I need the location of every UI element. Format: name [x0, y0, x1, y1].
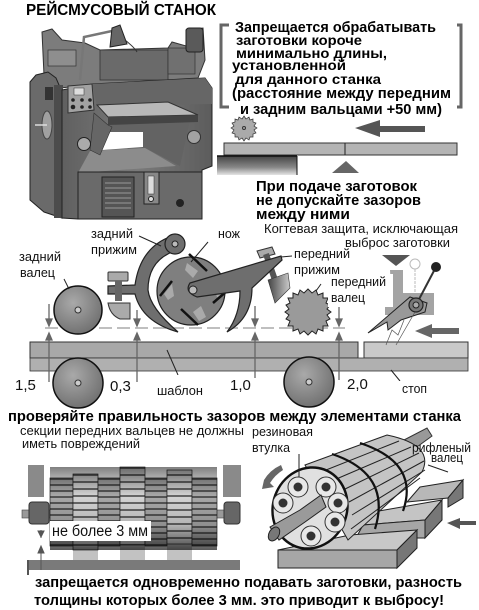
labels: gap values: [13, 375, 430, 408]
warning text: minimum workpiece length: [232, 20, 451, 118]
labels: sleeve and ribbed roller: рифленый: [412, 440, 471, 455]
labels: sleeve and ribbed roller: валец: [431, 450, 463, 465]
warning text: minimum workpiece length: установленной: [232, 57, 346, 73]
title: РЕЙСМУСОВЫЙ СТАНОК: [26, 1, 217, 19]
labels: cutting zone parts: передний: [294, 246, 350, 261]
illustration: thickness planer machine: [30, 25, 212, 219]
cross-section diagram of cutting zone: [30, 234, 468, 408]
warning text: no gaps: [256, 179, 421, 223]
labels: cutting zone parts: прижим: [294, 262, 340, 277]
front clamp arm: [188, 247, 290, 332]
labels: gap values: стоп: [402, 382, 427, 396]
bracket frame: [221, 25, 461, 107]
diagram: ribbed roller with rubber sleeves: [261, 428, 476, 568]
labels: sleeve and ribbed roller: [252, 424, 471, 465]
warning text: minimum workpiece length: минимально длины,: [236, 45, 387, 61]
leader lines: [64, 236, 400, 381]
labels: cutting zone parts: передний: [331, 274, 386, 289]
caption: claw protection: Когтевая защита, исключающая: [264, 221, 458, 236]
labels: gap values: 2,0: [347, 376, 368, 393]
labels: gap values: 1,0: [230, 377, 251, 394]
labels: cutting zone parts: задний: [91, 226, 133, 241]
warning text: workpiece thickness: толщины которых более 3 мм. это приводит к выбросу!: [34, 593, 444, 609]
labels: cutting zone parts: [19, 226, 393, 307]
cutter head with knives: [157, 254, 228, 325]
labels: gap values: 1,5: [15, 377, 36, 394]
diagram: feeding workpieces without gaps: [217, 116, 457, 175]
labels: cutting zone parts: прижим: [91, 242, 137, 257]
claw protection device: [368, 255, 459, 345]
warning text: minimum workpiece length: заготовки короче: [236, 32, 362, 48]
caption: roller sections: секции передних вальцев не должны: [20, 423, 244, 438]
labels: cutting zone parts: валец: [20, 265, 56, 280]
warning text: no gaps: не допускайте зазоров: [256, 193, 421, 209]
warning text: no gaps: между ними: [256, 207, 350, 223]
warning text: minimum workpiece length: Запрещается обрабатывать: [235, 20, 436, 36]
back board: [407, 480, 463, 507]
caption: claw protection: [264, 221, 458, 250]
rear clamp: [108, 234, 185, 332]
warning text: workpiece thickness: запрещается одновременно подавать заготовки, разность: [35, 575, 462, 591]
front board: [278, 530, 417, 568]
labels: cutting zone parts: валец: [331, 290, 366, 305]
diagram: sectional feed roller front view: не более 3 мм: [52, 523, 148, 540]
labels: sleeve and ribbed roller: резиновая: [252, 424, 313, 439]
middle board: [356, 500, 442, 538]
rear upper roller: [54, 286, 102, 334]
lower rollers: [53, 357, 334, 408]
caption: claw protection: выброс заготовки: [345, 235, 450, 250]
warning text: minimum workpiece length: для данного станка: [235, 71, 381, 87]
diagram: sectional feed roller front view: [22, 465, 241, 575]
labels: gap values: шаблон: [157, 383, 203, 398]
caption: roller sections: [20, 423, 244, 451]
warning text: workpiece thickness: [34, 575, 462, 609]
caption: roller sections: иметь повреждений: [22, 436, 140, 451]
labels: sleeve and ribbed roller: втулка: [252, 440, 291, 455]
heading: check gaps: проверяйте правильность зазоров между элементами станка: [8, 408, 462, 425]
warning text: no gaps: При подаче заготовок: [256, 179, 418, 195]
front toothed roller: [285, 289, 331, 335]
labels: gap values: 0,3: [110, 378, 131, 395]
labels: cutting zone parts: нож: [218, 226, 240, 241]
warning text: minimum workpiece length: и задним вальцами +50 мм): [240, 102, 442, 118]
gap arrows: [46, 304, 342, 382]
labels: cutting zone parts: задний: [19, 249, 61, 264]
warning text: minimum workpiece length: (расстояние между передним: [232, 86, 451, 102]
rubber sleeves: [273, 477, 348, 546]
